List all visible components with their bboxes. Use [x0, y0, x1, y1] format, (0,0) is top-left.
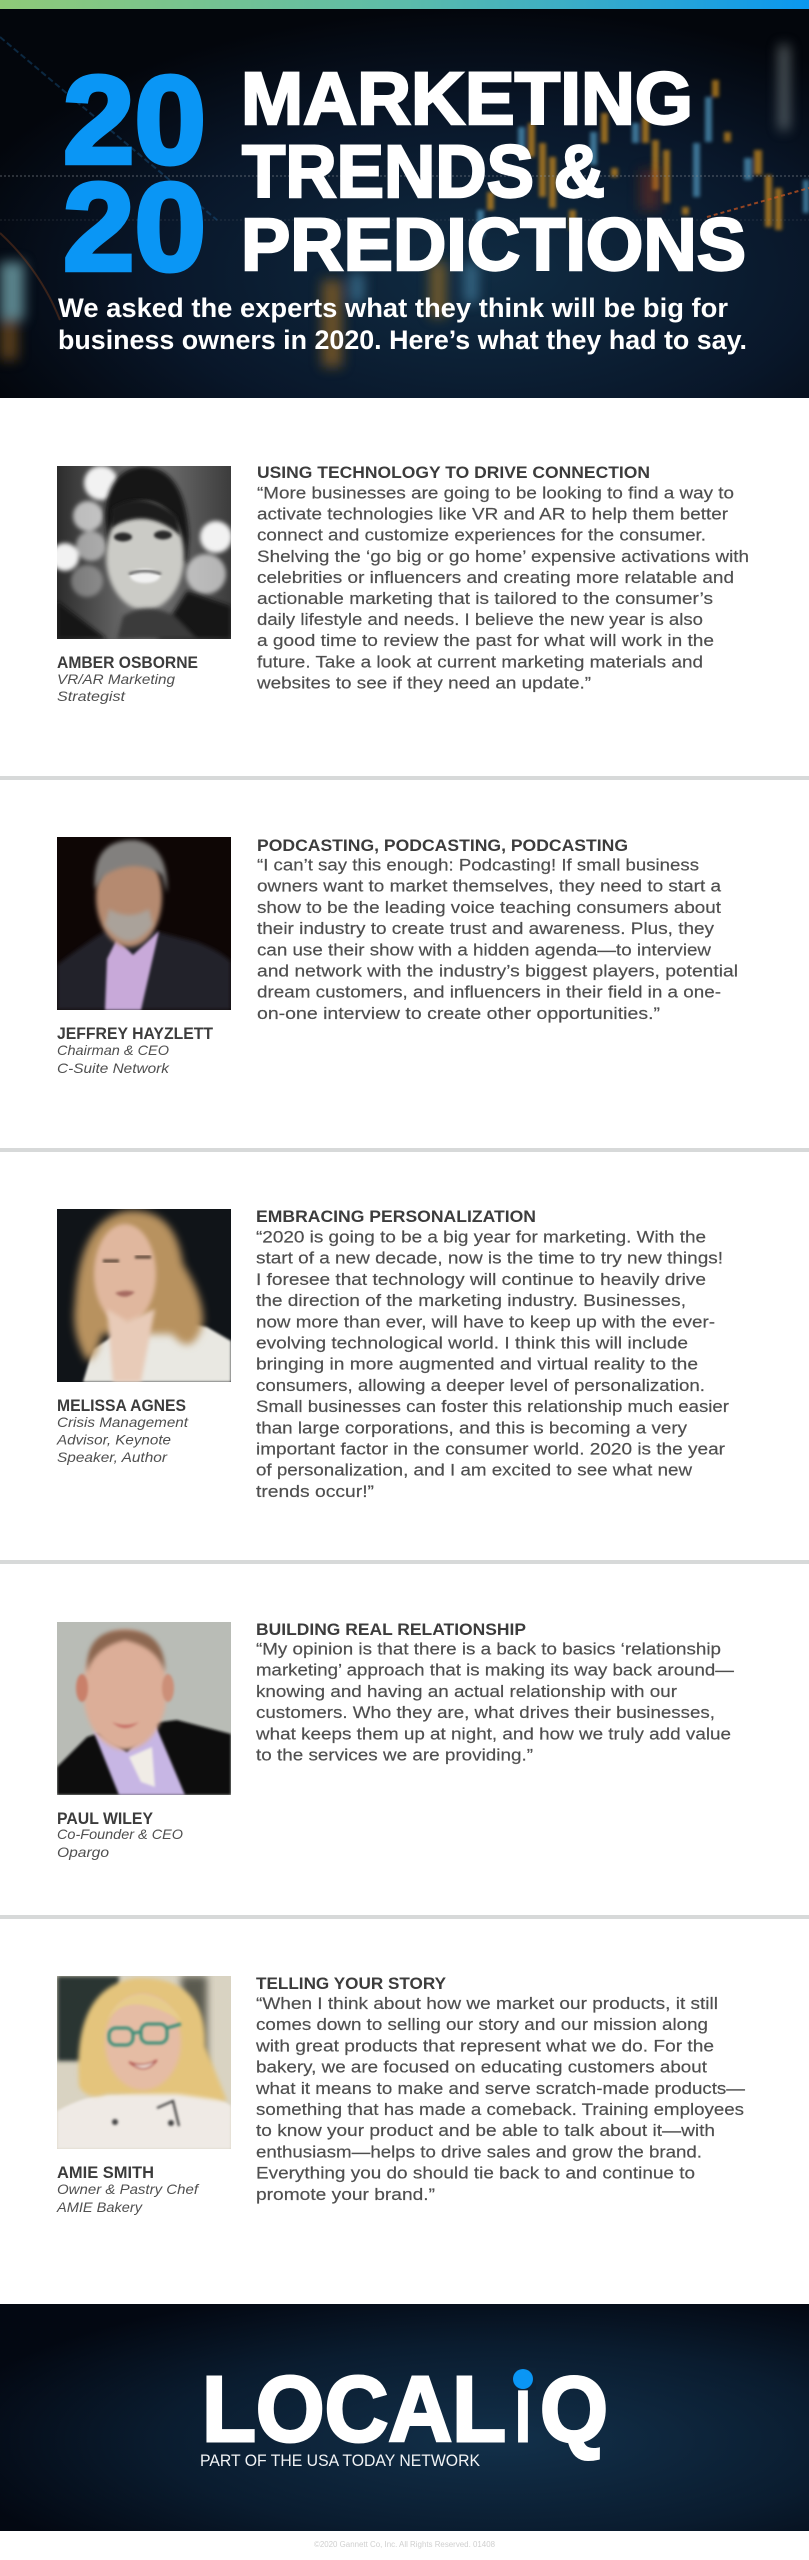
- quote: Small businesses can foster this relationship much easier: [256, 1397, 729, 1416]
- photo: Melissa Agnes: [57, 1209, 231, 1383]
- quote: activate technologies like VR and AR to help them better: [257, 505, 728, 524]
- quote: “My opinion is that there is a back to basics ‘relationship: [256, 1640, 721, 1658]
- quote: trends occur!”: [256, 1482, 374, 1501]
- quote: [255, 1994, 745, 2204]
- subtitle: [58, 293, 747, 355]
- title: PREDICTIONS: [241, 203, 746, 286]
- quote: “2020 is going to be a big year for marketing. With the: [256, 1228, 706, 1246]
- quote: [257, 856, 738, 1023]
- role: Co-Founder & CEO: [57, 1826, 183, 1842]
- quote: important factor in the consumer world. 2020 is the year: [256, 1440, 725, 1458]
- copyright: ©2020 Gannett Co, Inc. All Rights Reserved. 01408: [314, 2540, 496, 2549]
- panel: Paul Wiley: [57, 1620, 734, 1860]
- quote: Everything you do should tie back to and continue to: [256, 2164, 695, 2183]
- title number 2020: 20: [63, 51, 206, 190]
- panel: Jeffrey Hayzlett: [57, 836, 738, 1076]
- role: Owner & Pastry Chef: [57, 2181, 200, 2197]
- quote: the direction of the marketing industry. Businesses,: [256, 1291, 686, 1310]
- quote: consumers, allowing a deeper level of personalization.: [256, 1376, 705, 1395]
- quote: [255, 1640, 734, 1764]
- quote: bringing in more augmented and virtual reality to the: [256, 1355, 698, 1374]
- quote: “I can’t say this enough: Podcasting! If small business: [257, 856, 699, 874]
- role: Strategist: [57, 688, 126, 704]
- role: [57, 671, 175, 704]
- name: PAUL WILEY: [57, 1809, 154, 1828]
- quote: and network with the industry’s biggest players, potential: [257, 962, 738, 980]
- role: VR/AR Marketing: [57, 671, 175, 687]
- role: [57, 1042, 170, 1076]
- role: C-Suite Network: [57, 1060, 170, 1076]
- photo: Amber Osborne: [51, 466, 232, 639]
- quote: future. Take a look at current marketing materials and: [257, 652, 703, 671]
- quote: “When I think about how we market our products, it still: [256, 1994, 718, 2013]
- title: MARKETING: [241, 57, 693, 140]
- quote: than large corporations, and this is becoming a very: [256, 1418, 688, 1437]
- quote: comes down to selling our story and our mission along: [256, 2015, 708, 2034]
- logo: LOCALiQ: LOCAL: [202, 2357, 506, 2461]
- heading: BUILDING REAL RELATIONSHIP: [256, 1620, 526, 1639]
- quote: [256, 484, 749, 692]
- quote: enthusiasm—helps to drive sales and grow the brand.: [256, 2142, 702, 2161]
- photo: Paul Wiley: [57, 1622, 231, 1796]
- heading: USING TECHNOLOGY TO DRIVE CONNECTION: [257, 463, 650, 482]
- quote: something that has made a comeback. Training employees: [256, 2100, 744, 2119]
- quote: celebrities or influencers and creating more relatable and: [257, 568, 734, 587]
- role: [57, 1826, 183, 1860]
- quote: with great products that represent what we do. For the: [255, 2036, 714, 2055]
- quote: now more than ever, will have to keep up with the ever-: [256, 1312, 715, 1331]
- quote: to the services we are providing.”: [256, 1746, 533, 1764]
- name: AMIE SMITH: [57, 2163, 154, 2182]
- quote: knowing and having an actual relationship with our: [256, 1682, 677, 1701]
- quote: promote your brand.”: [256, 2185, 435, 2204]
- quote: evolving technological world. I think this will include: [256, 1334, 688, 1352]
- title: [241, 57, 746, 286]
- quote: daily lifestyle and needs. I believe the new year is also: [257, 610, 703, 629]
- panel: Amber Osborne: [51, 463, 749, 704]
- chart background: [0, 37, 809, 367]
- quote: a good time to review the past for what will work in the: [257, 631, 714, 650]
- title number 2020: [63, 51, 206, 297]
- role: [56, 1414, 189, 1465]
- role: Chairman & CEO: [57, 1042, 169, 1058]
- quote: of personalization, and I am excited to see what new: [256, 1461, 693, 1480]
- role: [56, 2181, 200, 2215]
- role: AMIE Bakery: [56, 2199, 143, 2215]
- quote: connect and customize experiences for the consumer.: [257, 526, 706, 545]
- quote: dream customers, and influencers in their field in a one-: [257, 983, 721, 1002]
- tagline: PART OF THE USA TODAY NETWORK: [200, 2451, 481, 2470]
- panel: Melissa Agnes: [56, 1207, 729, 1501]
- name: AMBER OSBORNE: [57, 653, 198, 672]
- panel: Amie Smith: [56, 1974, 745, 2215]
- photo: Amie Smith: [57, 1976, 231, 2150]
- quote: show to be the leading voice teaching consumers about: [257, 898, 721, 917]
- title: TRENDS &: [242, 130, 605, 213]
- logo: LOCALiQ: Q: [540, 2357, 608, 2461]
- role: Advisor, Keynote: [56, 1432, 171, 1448]
- quote: Shelving the ‘go big or go home’ expensive activations with: [257, 547, 749, 566]
- title number 2020: 20: [63, 158, 206, 297]
- quote: to know your product and be able to talk about it—with: [256, 2121, 715, 2140]
- logo: LOCALiQ: i: [515, 2357, 531, 2461]
- subtitle: We asked the experts what they think will be big for: [58, 293, 728, 323]
- heading: PODCASTING, PODCASTING, PODCASTING: [257, 836, 628, 855]
- quote: their industry to create trust and awareness. Plus, they: [257, 919, 715, 938]
- name: MELISSA AGNES: [57, 1396, 186, 1415]
- quote: customers. Who they are, what drives their businesses,: [256, 1703, 715, 1722]
- heading: TELLING YOUR STORY: [256, 1974, 447, 1993]
- hero banner: [0, 9, 809, 398]
- role: Crisis Management: [57, 1414, 189, 1430]
- quote: marketing’ approach that is making its way back around—: [256, 1661, 734, 1680]
- role: Speaker, Author: [57, 1449, 168, 1465]
- top gradient bar: [0, 0, 809, 9]
- name: JEFFREY HAYZLETT: [57, 1024, 214, 1043]
- quote: websites to see if they need an update.”: [256, 673, 591, 692]
- subtitle: business owners in 2020. Here’s what they had to say.: [58, 325, 747, 355]
- quote: what it means to make and serve scratch-made products—: [255, 2079, 745, 2098]
- role: Opargo: [57, 1844, 109, 1860]
- quote: bakery, we are focused on educating customers about: [256, 2058, 707, 2077]
- quote: owners want to market themselves, they need to start a: [257, 877, 722, 896]
- quote: start of a new decade, now is the time to try new things!: [256, 1249, 723, 1268]
- photo: Jeffrey Hayzlett: [57, 837, 231, 1011]
- quote: actionable marketing that is tailored to the consumer’s: [257, 589, 713, 608]
- quote: “More businesses are going to be looking to find a way to: [257, 484, 734, 502]
- footer banner: [0, 2304, 809, 2531]
- quote: what keeps them up at night, and how we truly add value: [255, 1724, 731, 1743]
- quote: I foresee that technology will continue to heavily drive: [256, 1270, 706, 1289]
- quote: [256, 1228, 729, 1501]
- quote: can use their show with a hidden agenda—to interview: [257, 940, 712, 959]
- heading: EMBRACING PERSONALIZATION: [256, 1207, 536, 1226]
- quote: on-one interview to create other opportunities.”: [257, 1004, 660, 1023]
